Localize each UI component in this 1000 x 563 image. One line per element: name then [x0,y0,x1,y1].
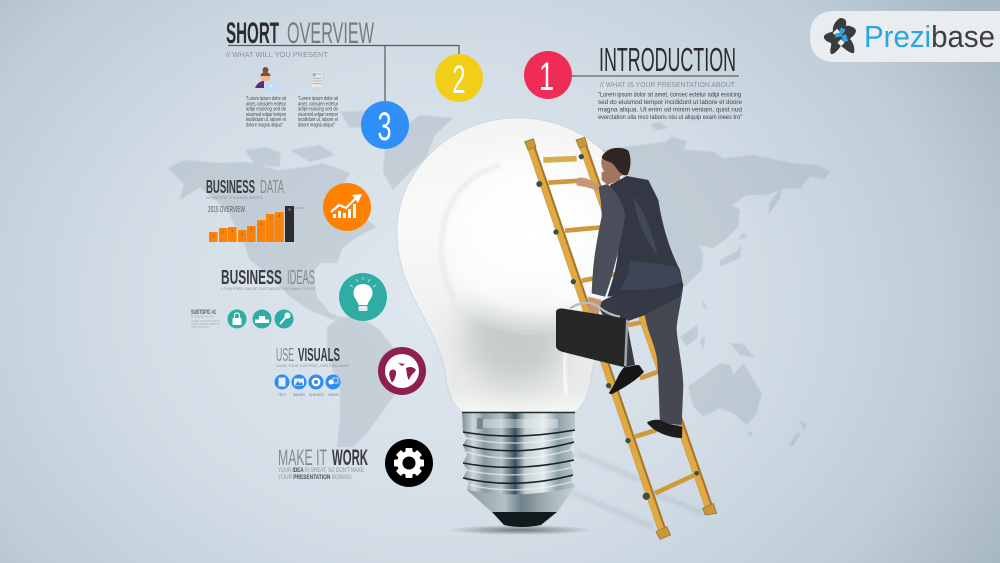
front leg [600,284,683,367]
subheading: // ADD YOUR CONTENT, JOIN FUN GAME [276,363,349,368]
text line 2: YOUR PRESENTATION BORING! [278,474,352,481]
subtopic text: CUSTOMIZE THIS TEXT [191,314,215,318]
section: short overview [226,17,459,128]
connector line from 1 [572,75,739,77]
bulb glass [397,118,639,412]
bulb ground shadow [448,525,592,535]
map: north america [168,160,377,320]
section: use visuals [274,345,349,397]
map: australia [688,363,762,437]
inner reflection edge [441,165,500,392]
lower right highlight [564,345,567,395]
text block: right quote: dolore magna aliqua" [298,122,335,128]
icon: teal light bulb [339,273,387,321]
bar chart: 6 [260,221,263,226]
icon: videos [326,374,340,390]
logo badge: prezibase [810,11,1000,62]
bar chart: 8 [278,213,281,218]
map: arctic islands [245,110,385,167]
text line 1: YOUR IDEA IS GREAT, SO DON'T MAKE [278,467,364,474]
map: new zealand [788,420,807,446]
badge: number 2: 2 [452,58,466,102]
world map [168,110,830,447]
bulb glow [430,135,630,335]
heading: business data: BUSINESS [206,177,255,197]
bar chart: 3 [231,228,234,233]
heading word: visuals: VISUALS [298,345,340,365]
text block: left quote [246,96,286,128]
section: business data [206,177,303,242]
text block: intro paragraph: sed do eiusmod tempor incididunt ut labore et doore [598,99,742,106]
bar chart: 1 [212,233,215,238]
subheading: // WHAT IS YOUR PRESENTATION ABOUT [600,80,735,89]
bar chart: 4 [241,231,244,236]
ladder rungs [543,159,698,493]
heading word: overview: OVERVIEW [287,17,374,50]
map: greenland [383,115,453,190]
subtopic text [191,314,221,329]
ladder shadow [573,453,703,527]
text block: intro paragraph: everctation ulla mco laboris nisi ut aliquip exam inees tro" [598,114,742,121]
raised hand [576,178,600,192]
ladder end caps [525,137,717,539]
text block: right quote: adipi essicing sed do [298,107,338,113]
neck [602,172,620,185]
icon labels: 3D MODELS [309,392,324,397]
text block: right quote: "Lorem ipsum dolor sit [298,96,338,102]
foot on lower rung [647,420,682,438]
icon: podium [252,310,272,328]
subheading: // WHAT WILL YOU PRESENT [226,50,328,59]
badge: number 3: 3 [378,105,392,149]
subheading: // THIS PREZI CAN BE CUSTOMIZED FOR MANY TOPICS [221,286,315,291]
hair [602,148,631,175]
text block: right quote [298,96,338,128]
section: use visuals: USE [276,345,294,365]
shoe on upper rung [609,365,644,394]
bar chart: 7 [269,215,272,220]
section: introduction [572,41,743,121]
heading: introduction: INTRODUCTION [599,41,736,78]
text block: left quote: amet, consulen ectetur [246,101,286,107]
map: asia [600,137,830,287]
icon: black gear [385,439,433,487]
jacket shading [633,197,658,257]
jacket [607,176,683,297]
bar chart [209,206,303,242]
heading word: work: WORK [332,445,368,470]
heading word: data: DATA [260,177,284,197]
chart label: 2015 OVERVIEW [208,205,245,214]
ladder [525,137,717,539]
grey haze in lower bulb [463,290,567,386]
text block: right quote: incididunt ut, labore et [298,117,338,123]
section: business ideas [191,267,315,329]
icon: text [274,374,290,390]
taper [467,487,575,512]
text block: intro paragraph [598,92,743,121]
text block: intro paragraph: "Lorem ipsum dolor sit amet, consec ectetur adipi essicing [598,92,741,98]
text block: left quote: dolore magna aliqua" [246,122,283,128]
map: southeast asia [680,298,755,358]
map: scattered islands [533,120,668,130]
subtopic text: AMET CONSEC ECTETUR [191,322,221,326]
section: make it work [278,445,368,481]
text block: left quote: adipi essicing sed do [246,107,286,113]
text block: left quote: incididunt ut, labore et [246,117,286,123]
heading: business ideas: BUSINESS [221,267,282,289]
map: kamchatka and japan [719,186,783,267]
text block: intro paragraph: magna aliqua. Ut enim od minim veniam, quist nud [598,106,743,114]
ladder bolts [536,154,699,500]
icon: padlock [228,310,246,328]
icon labels: IMAGES [293,392,305,397]
badge: number 1 [524,51,572,99]
logo wordmark: Prezibase [864,19,995,54]
icon: images [292,374,306,390]
logo pill [810,11,1000,62]
badge: number 2 [435,54,483,102]
icon: key [274,310,294,328]
subtopic label: SUBTOPIC #1 [191,309,216,316]
rear trouser leg [645,285,683,425]
icon: maroon globe [378,347,426,395]
text block: right quote: eiusmod edgar tempor [298,112,338,118]
text: IDEAS [287,267,315,289]
bulb screw base [462,412,575,527]
icon labels: VIDEOS [328,392,339,397]
light bulb [397,118,639,527]
head [601,148,629,177]
bar chart: 2 [222,229,225,234]
ladder rails [529,142,710,533]
icon: orange growth chart [323,183,371,231]
lower hand [588,297,602,317]
bar chart: 9 [288,207,291,212]
icon: person at laptop [255,67,278,92]
subtopic text: ADIPI ESSICING [191,325,210,329]
arm [592,184,625,297]
text block: left quote: eiusmod edgar tempor [246,112,286,118]
connector lines to 2 and 3 [228,46,459,102]
bar chart: 5 [250,227,253,232]
subtopic text: LOREM IPSUM DOLOR SIT [191,319,220,323]
text block: left quote: "Lorem ipsum dolor sit [246,96,286,102]
businessman climbing [556,148,683,438]
badge: number 3 [361,101,409,149]
jacket highlight [620,260,682,290]
icon labels: TEXT [278,392,286,397]
icon: document [311,71,323,88]
briefcase [556,303,628,367]
map: south america [327,317,416,447]
icon labels [278,392,339,397]
heading: make it: MAKE IT [278,445,327,470]
text block: right quote: amet, consulen ectetur [298,101,338,107]
badge: number 1: 1 [539,55,554,99]
icon: 3d models [308,374,324,390]
heading: short overview: SHORT [226,17,279,50]
subheading: // A FIRST STEP TO BUSINESS REPORTS [206,195,263,200]
icon: logo star [824,18,856,54]
